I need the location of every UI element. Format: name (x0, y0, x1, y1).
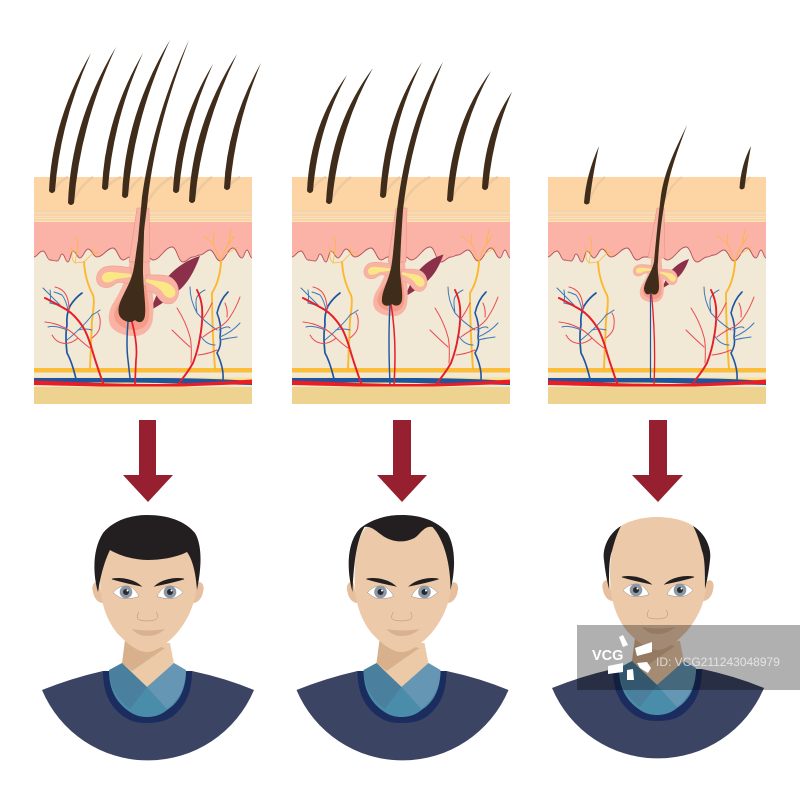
arrow: stage 2 (377, 420, 427, 502)
arrow: stage 1 (123, 420, 173, 502)
panel: skin cross-section, healthy hair (34, 40, 261, 404)
watermark id: ID: VCG211243048979 (656, 655, 780, 669)
watermark (577, 625, 800, 690)
hair shadows on skin (590, 177, 750, 200)
hair strands above skin (584, 146, 751, 204)
arrow: stage 3 (632, 420, 683, 502)
hair: full (94, 515, 201, 592)
hair: sides only (604, 526, 710, 589)
main hair with bulb (644, 125, 687, 295)
hair follicle with gland and muscle (97, 208, 200, 336)
main hair with bulb (382, 62, 443, 306)
panel: skin cross-section, thinning hair (292, 62, 512, 404)
hair shadows on skin (311, 177, 498, 203)
hair: receding (349, 515, 454, 592)
panel: skin cross-section, miniaturised hair (548, 125, 766, 404)
watermark logo (608, 635, 652, 680)
hair shadows on skin (53, 177, 240, 204)
blood supply to follicle (389, 304, 395, 385)
blood supply to follicle (127, 322, 136, 384)
watermark brand: VCG (592, 648, 623, 664)
portrait: receding hairline (296, 515, 508, 760)
hair strands above skin (49, 40, 261, 205)
portrait: balding (552, 517, 764, 758)
portrait: full head of hair (42, 515, 254, 760)
hair follicle with gland and muscle (364, 208, 444, 316)
hair follicle with gland and muscle (633, 208, 689, 302)
main hair with bulb (118, 40, 189, 322)
blood supply to follicle (650, 294, 655, 385)
hair strands above skin (307, 62, 512, 204)
